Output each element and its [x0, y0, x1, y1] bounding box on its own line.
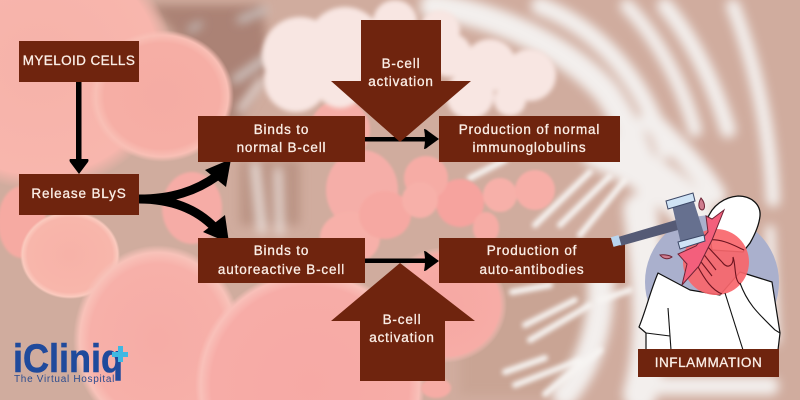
label: top B-cell activation — [368, 56, 434, 89]
arm and hand lines — [646, 283, 780, 350]
blue halo circle — [645, 215, 779, 349]
box: production of normal immunoglobulins: immunoglobulins — [472, 140, 587, 155]
arrow: normal B-cell to immunoglobulins — [365, 129, 439, 149]
left and centre red blood cells — [0, 0, 176, 195]
label: bottom B-cell activation: activation — [369, 330, 435, 345]
brown vessel interior — [150, 5, 610, 395]
box: release BLyS — [19, 174, 139, 215]
impact star — [678, 210, 724, 285]
person head — [707, 196, 760, 252]
gavel — [611, 193, 705, 249]
label: top B-cell activation: B-cell — [382, 56, 420, 70]
box: binds to autoreactive B-cell: autoreactive B-cell — [218, 262, 345, 276]
label: top B-cell activation: activation — [368, 74, 434, 89]
red pain circle — [683, 229, 749, 295]
logo: iCliniq — [13, 340, 128, 385]
box: production of normal immunoglobulins — [439, 116, 620, 162]
box: production of auto-antibodies — [439, 238, 625, 283]
logo tagline: The Virtual Hospital — [14, 374, 115, 385]
person body — [639, 272, 780, 350]
box: production of auto-antibodies: Production of — [487, 243, 577, 258]
box: binds to autoreactive B-cell — [198, 238, 365, 283]
arrow: myeloid cells to release BLyS — [70, 82, 88, 174]
box: inflammation — [638, 349, 779, 377]
box: binds to normal B-cell: Binds to — [254, 122, 309, 136]
label: bottom B-cell activation — [369, 312, 435, 345]
box: myeloid cells — [19, 41, 139, 82]
arrow: release BLyS to normal B-cell — [139, 159, 231, 199]
block arrow: bottom B-cell activation — [331, 263, 475, 381]
box: binds to normal B-cell — [198, 116, 365, 162]
box: production of auto-antibodies: auto-antibodies — [479, 262, 585, 276]
box: production of normal immunoglobulins: Production of normal — [459, 122, 600, 136]
box: myeloid cells: MYELOID CELLS — [23, 53, 135, 68]
label: bottom B-cell activation: B-cell — [383, 312, 421, 326]
logo plus sign — [112, 346, 128, 362]
pale cell cluster — [262, 0, 556, 119]
sweat drops — [660, 198, 704, 259]
box: binds to normal B-cell: normal B-cell — [237, 140, 326, 155]
arrow: release BLyS to autoreactive B-cell — [139, 199, 229, 243]
box: inflammation: INFLAMMATION — [655, 355, 762, 370]
box: release BLyS: Release BLyS — [31, 186, 127, 201]
block arrow: top B-cell activation — [331, 20, 471, 142]
box: binds to autoreactive B-cell: Binds to — [254, 243, 309, 258]
hand — [697, 240, 744, 294]
feathered white streaks — [470, 160, 630, 394]
arrow: autoreactive B-cell to auto-antibodies — [365, 251, 439, 271]
white swirl bands — [190, 6, 775, 394]
